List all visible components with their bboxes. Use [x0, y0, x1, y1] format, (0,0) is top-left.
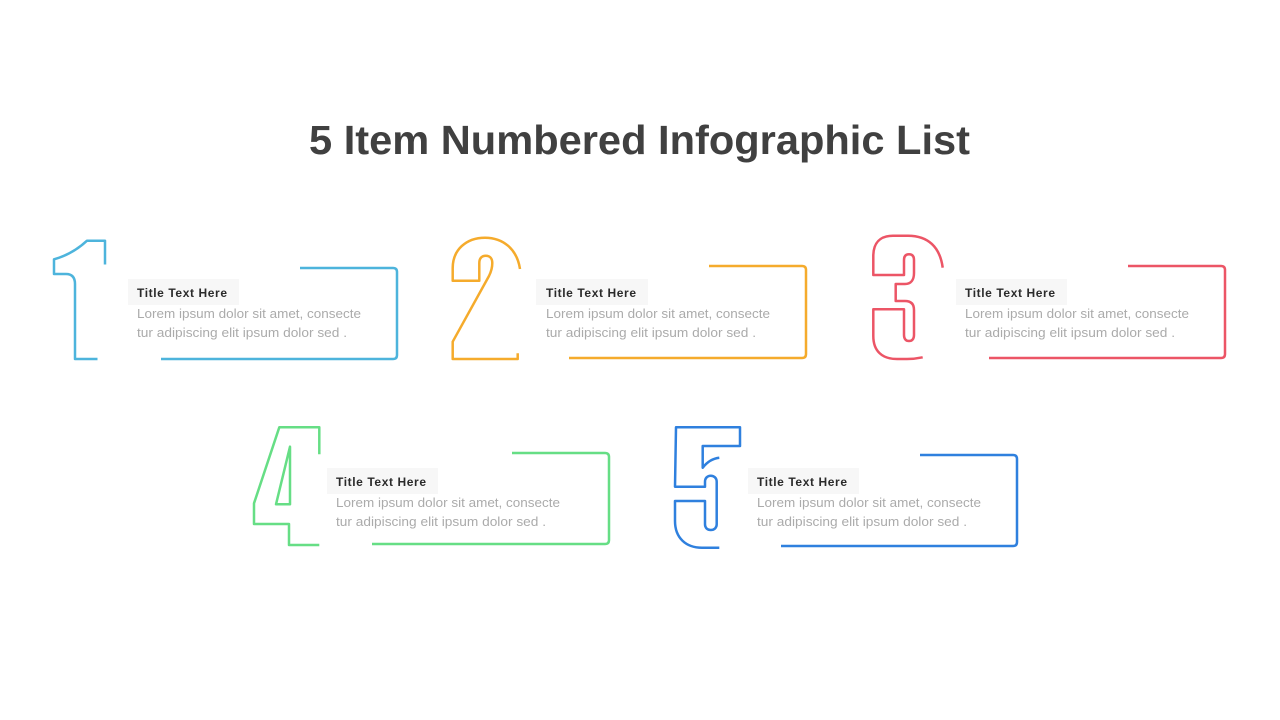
item 1 body text: Lorem ipsum dolor sit amet, consecte [137, 307, 361, 321]
item 3 frame [989, 266, 1225, 358]
item 3 title label [956, 279, 1067, 305]
number 4 outline [254, 427, 319, 545]
item 5 body text: Lorem ipsum dolor sit amet, consecte [757, 496, 981, 510]
item 2 body text: tur adipiscing elit ipsum dolor sed . [546, 326, 756, 340]
number 3 outline [873, 236, 943, 359]
item 5 title label [748, 468, 859, 494]
item 4 frame [372, 453, 609, 544]
item 2 frame [569, 266, 806, 358]
item 4 body text: Lorem ipsum dolor sit amet, consecte [336, 496, 560, 510]
item 4 title label [327, 468, 438, 494]
item 5 body text: tur adipiscing elit ipsum dolor sed . [757, 515, 967, 529]
item 2 title label: Title Text Here [546, 286, 636, 300]
item 4 body text: tur adipiscing elit ipsum dolor sed . [336, 515, 546, 529]
item 4 [254, 427, 609, 545]
item 5 title label: Title Text Here [757, 475, 847, 489]
item 1 [54, 241, 397, 359]
item 2 body text: Lorem ipsum dolor sit amet, consecte [546, 307, 770, 321]
item 5 [675, 427, 1017, 548]
item 1 title label: Title Text Here [137, 286, 227, 300]
item 1 body text [137, 307, 361, 340]
item 4 title label: Title Text Here [336, 475, 426, 489]
item 1 body text: tur adipiscing elit ipsum dolor sed . [137, 326, 347, 340]
item 2 title label [536, 279, 648, 305]
item 1 title label [128, 279, 239, 305]
item 3 title label: Title Text Here [965, 286, 1055, 300]
item 4 body text [336, 496, 560, 529]
item 3 [873, 236, 1225, 359]
item 1 frame [161, 268, 397, 359]
item 2 body text [546, 307, 770, 340]
title: 5 Item Numbered Infographic List [309, 117, 970, 163]
item 5 body text [757, 496, 981, 529]
item 5 frame [781, 455, 1017, 546]
item 3 body text: tur adipiscing elit ipsum dolor sed . [965, 326, 1175, 340]
item 2 [453, 238, 806, 359]
number 1 outline [54, 241, 105, 359]
number 2 outline [453, 238, 520, 359]
item 3 body text [965, 307, 1189, 340]
number 5 outline [675, 427, 740, 548]
item 3 body text: Lorem ipsum dolor sit amet, consecte [965, 307, 1189, 321]
